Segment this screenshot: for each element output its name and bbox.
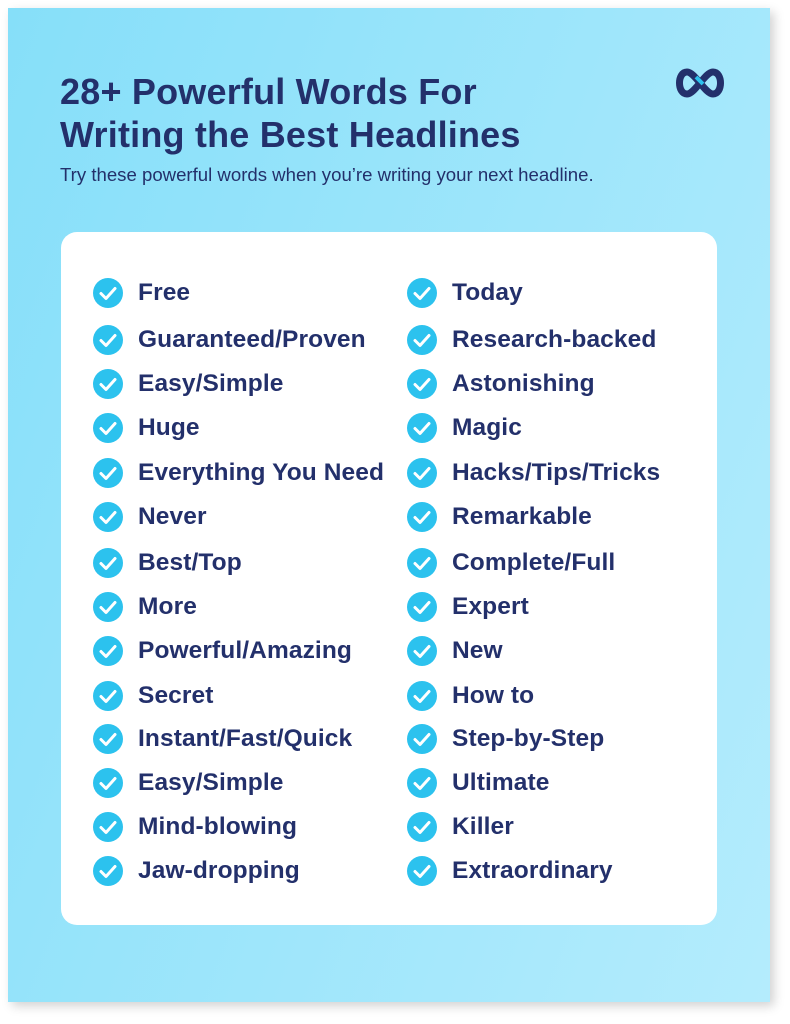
panel: word list card: Research-backed (452, 326, 656, 353)
panel: word list card: Step-by-Step (452, 725, 604, 752)
panel: word list card: Best/Top (138, 549, 242, 576)
panel: word list card: Hacks/Tips/Tricks (452, 459, 660, 486)
panel: word list card: How to (452, 682, 534, 709)
panel: word list card: Everything You Need (138, 459, 384, 486)
panel: word list card: Easy/Simple (138, 769, 283, 796)
panel: word list card: Killer (452, 813, 514, 840)
panel: word list card: Mind-blowing (138, 813, 297, 840)
icon: infinity logo (676, 68, 724, 98)
subtitle: Try these powerful words when you’re writing your next headline. (60, 164, 594, 185)
panel: word list card: Complete/Full (452, 549, 615, 576)
panel: word list card: Jaw-dropping (138, 857, 300, 884)
panel: word list card: Remarkable (452, 503, 592, 530)
title (60, 71, 521, 155)
panel: word list card: More (138, 593, 197, 620)
list items (93, 278, 660, 886)
panel: word list card: Magic (452, 414, 522, 441)
panel: word list card: Guaranteed/Proven (138, 326, 366, 353)
panel: word list card: Expert (452, 593, 529, 620)
panel: word list card: Secret (138, 682, 214, 709)
panel: word list card: Instant/Fast/Quick (138, 725, 352, 752)
panel: word list card: Astonishing (452, 370, 595, 397)
title: 28+ Powerful Words For (60, 71, 477, 112)
panel: word list card: Powerful/Amazing (138, 637, 352, 664)
panel: word list card: Ultimate (452, 769, 549, 796)
panel: word list card: Extraordinary (452, 857, 613, 884)
panel: word list card: Easy/Simple (138, 370, 283, 397)
panel: word list card: Free (138, 279, 190, 306)
panel: word list card: Today (452, 279, 523, 306)
panel: word list card (61, 232, 717, 925)
panel: word list card: New (452, 637, 503, 664)
panel: word list card: Never (138, 503, 207, 530)
title: Writing the Best Headlines (60, 114, 521, 155)
panel: word list card: Huge (138, 414, 200, 441)
